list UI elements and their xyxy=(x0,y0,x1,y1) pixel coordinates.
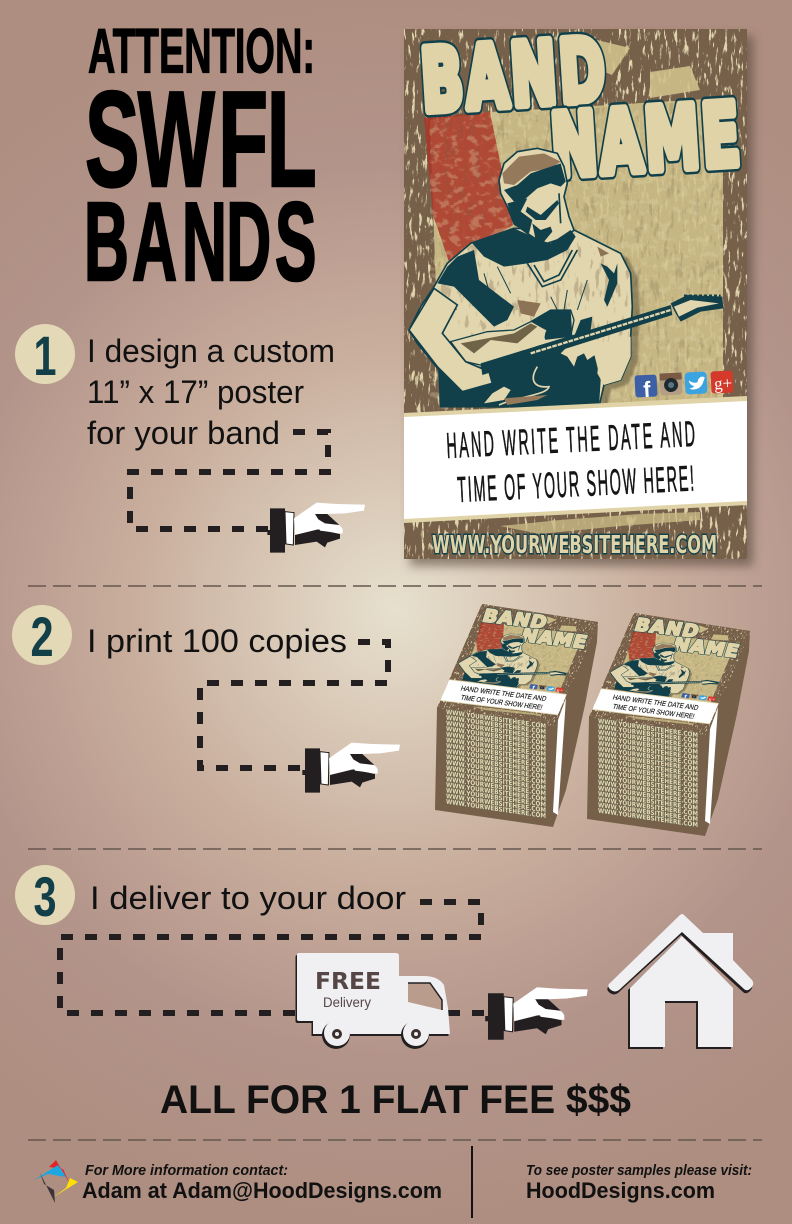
poster name: NAME xyxy=(548,86,745,197)
stack of posters right: WWW.YOURWEBSITEHERE.COM xyxy=(598,790,698,812)
icon: pointing hand 3 xyxy=(485,987,588,1040)
panel: band poster xyxy=(404,21,747,559)
handwriting prompt xyxy=(446,421,694,502)
stack of posters left: WWW.YOURWEBSITEHERE.COM xyxy=(446,736,546,758)
step 3 text: I deliver to your door xyxy=(90,880,406,916)
stack of posters left: WWW.YOURWEBSITEHERE.COM xyxy=(446,786,546,809)
title: ATTENTION: xyxy=(88,16,315,86)
stack of posters right: TIME OF YOUR SHOW HERE! xyxy=(611,703,695,721)
arrow: step 3 dashed path xyxy=(60,902,486,1013)
poster white band and social icons xyxy=(404,370,747,523)
stack of posters right: WWW.YOURWEBSITEHERE.COM xyxy=(598,795,698,818)
stack of posters left: TIME OF YOUR SHOW HERE! xyxy=(459,694,543,712)
stack of posters left: WWW.YOURWEBSITEHERE.COM xyxy=(446,775,546,798)
step 1 text: I design a custom xyxy=(87,333,335,369)
stack of posters right: WWW.YOURWEBSITEHERE.COM xyxy=(598,717,698,739)
poster shadow xyxy=(410,36,753,566)
step 1 text: for your band xyxy=(87,415,280,451)
stack of posters right: BAND xyxy=(632,615,702,642)
flat fee headline: ALL FOR 1 FLAT FEE $$$ xyxy=(160,1078,631,1122)
handwriting prompt: HAND WRITE THE DATE AND xyxy=(445,413,696,466)
step 2 number xyxy=(12,605,72,669)
step 1 text: 11” x 17” poster xyxy=(87,374,304,410)
stack of posters right: BAND xyxy=(632,615,702,642)
icon: house xyxy=(607,914,753,1049)
stack of posters left: NAME xyxy=(518,626,590,653)
title: BANDS xyxy=(84,181,316,305)
stack of posters left: WWW.YOURWEBSITEHERE.COM xyxy=(446,753,546,775)
stack of posters right xyxy=(587,612,750,836)
stack of posters right: WWW.YOURWEBSITEHERE.COM xyxy=(598,807,698,829)
poster name: BAND xyxy=(418,21,611,132)
icon: delivery truck: Delivery xyxy=(323,994,371,1010)
stack of posters left: BAND xyxy=(480,606,550,633)
icon: delivery truck xyxy=(296,953,450,1049)
stack of posters right: WWW.YOURWEBSITEHERE.COM xyxy=(598,745,698,767)
step 1 number xyxy=(15,324,75,388)
stack of posters right: WWW.YOURWEBSITEHERE.COM xyxy=(598,723,698,745)
stack of posters right: WWW.YOURWEBSITEHERE.COM xyxy=(598,762,698,784)
title xyxy=(84,16,317,305)
stack of posters left: WWW.YOURWEBSITEHERE.COM xyxy=(446,719,546,742)
poster name: BAND xyxy=(418,21,611,132)
stack of posters right: WWW.YOURWEBSITEHERE.COM xyxy=(598,779,698,801)
contact text: For More information contact: xyxy=(85,1162,288,1179)
stack of posters left: BAND xyxy=(480,606,550,633)
stack of posters left: WWW.YOURWEBSITEHERE.COM xyxy=(446,758,546,781)
stack of posters left: HAND WRITE THE DATE AND xyxy=(459,685,548,703)
stack of posters left: WWW.YOURWEBSITEHERE.COM xyxy=(446,714,546,736)
arrow: step 2 dashed path xyxy=(200,642,388,768)
stack of posters right: WWW.YOURWEBSITEHERE.COM xyxy=(598,751,698,773)
stack of posters left: WWW.YOURWEBSITEHERE.COM xyxy=(446,764,546,786)
stack of posters left: WWW.YOURWEBSITEHERE.COM xyxy=(446,770,546,792)
icon: pointing hand 2 xyxy=(302,743,400,793)
step 3 number xyxy=(15,865,75,929)
stack of posters right: WWW.YOURWEBSITEHERE.COM xyxy=(598,756,698,779)
title: SWFL xyxy=(85,62,317,215)
stack of posters left: WWW.YOURWEBSITEHERE.COM xyxy=(446,708,546,730)
poster musician illustration xyxy=(409,148,723,408)
stack of posters right: WWW.YOURWEBSITEHERE.COM xyxy=(598,773,698,795)
step 3 number: 3 xyxy=(33,866,57,929)
step 1 text xyxy=(87,333,335,451)
stack of posters left: WWW.YOURWEBSITEHERE.COM xyxy=(446,781,546,803)
stack of posters right: WWW.YOURWEBSITEHERE.COM xyxy=(598,784,698,807)
stack of posters right: NAME xyxy=(670,635,742,662)
stack of posters left xyxy=(435,603,598,827)
stack of posters left: WWW.YOURWEBSITEHERE.COM xyxy=(446,798,546,820)
stack of posters right: NAME xyxy=(670,635,742,662)
step 2 number: 2 xyxy=(30,606,54,669)
footer divider xyxy=(471,1146,473,1218)
arrow: step 1 dashed path xyxy=(130,432,328,529)
stack of posters left: WWW.YOURWEBSITEHERE.COM xyxy=(446,730,546,753)
stack of posters right: HAND WRITE THE DATE AND xyxy=(611,694,700,712)
handwriting prompt: TIME OF YOUR SHOW HERE! xyxy=(456,458,695,510)
stack of posters right: WWW.YOURWEBSITEHERE.COM xyxy=(598,767,698,790)
divider xyxy=(28,586,762,1140)
stack of posters right: WWW.YOURWEBSITEHERE.COM xyxy=(598,801,698,823)
stack of posters left: WWW.YOURWEBSITEHERE.COM xyxy=(446,792,546,814)
icon: delivery truck: FREE xyxy=(315,969,381,995)
poster name: NAME xyxy=(548,86,745,197)
website text: To see poster samples please visit: xyxy=(526,1162,752,1179)
website text xyxy=(526,1162,752,1203)
website text: HoodDesigns.com xyxy=(526,1178,715,1203)
stack of posters right: WWW.YOURWEBSITEHERE.COM xyxy=(598,728,698,751)
stack of posters left: WWW.YOURWEBSITEHERE.COM xyxy=(446,725,546,747)
stack of posters right: WWW.YOURWEBSITEHERE.COM xyxy=(598,734,698,756)
contact text: Adam at Adam@HoodDesigns.com xyxy=(82,1178,442,1203)
stack of posters right: WWW.YOURWEBSITEHERE.COM xyxy=(598,739,698,762)
poster name xyxy=(420,32,742,182)
stack of posters left: WWW.YOURWEBSITEHERE.COM xyxy=(446,747,546,770)
icon: Hood Designs logo xyxy=(34,1160,78,1203)
stack of posters left: NAME xyxy=(518,626,590,653)
step 2 text: I print 100 copies xyxy=(87,623,347,659)
icon: pointing hand 1 xyxy=(267,503,365,553)
contact text xyxy=(82,1162,442,1203)
stack of posters left: WWW.YOURWEBSITEHERE.COM xyxy=(446,742,546,764)
step 1 number: 1 xyxy=(33,325,57,388)
